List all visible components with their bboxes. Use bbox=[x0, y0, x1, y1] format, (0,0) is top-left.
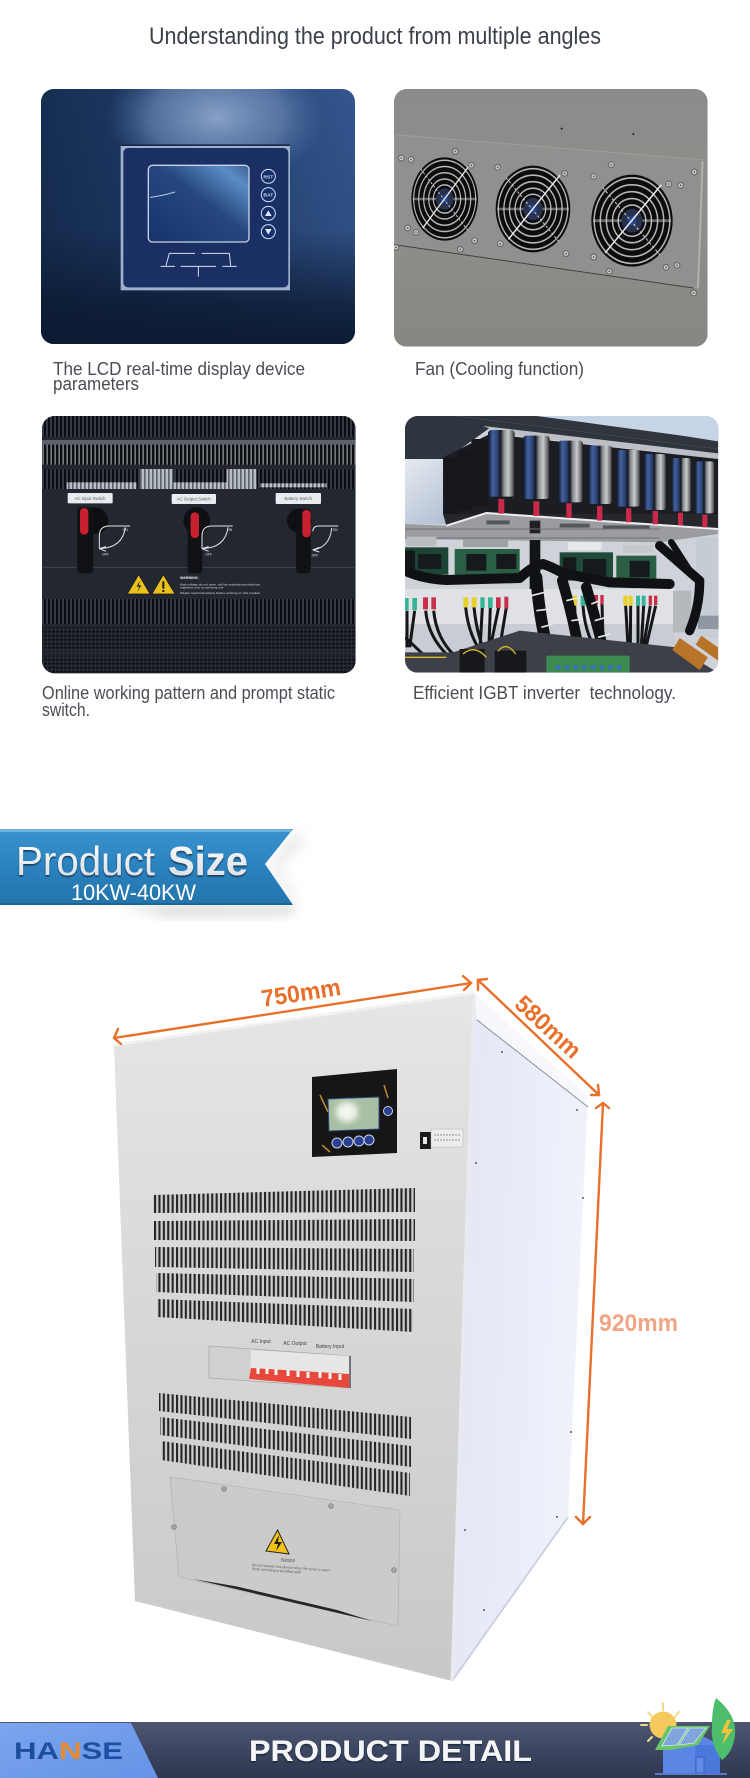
icon: solar house bbox=[641, 1698, 735, 1775]
LCD bezel bbox=[121, 144, 290, 290]
cabinet side bbox=[452, 993, 588, 1681]
dimension: depth label: 580mm bbox=[509, 990, 586, 1064]
breaker panel bbox=[209, 1339, 350, 1388]
dimension: depth arrow bbox=[478, 979, 599, 1095]
banner heading: Size bbox=[168, 838, 248, 884]
switch handle 3: ON bbox=[333, 528, 338, 532]
switch labels: AC Output Switch bbox=[177, 497, 211, 502]
busbar with red terminals bbox=[405, 499, 718, 542]
breaker panel: AC Output bbox=[283, 1341, 307, 1347]
wires and sleeves bbox=[405, 595, 657, 657]
switch handle 2: OFF bbox=[205, 552, 212, 556]
lower access panel bbox=[170, 1477, 400, 1626]
dimension: height arrow bbox=[576, 1103, 609, 1524]
caption: LCD: parameters bbox=[53, 374, 139, 394]
footer heading: PRODUCT DETAIL bbox=[249, 1735, 532, 1768]
control board bbox=[405, 631, 718, 673]
driver boards bbox=[405, 536, 656, 589]
caption: LCD: The LCD real-time display device bbox=[53, 359, 305, 379]
notice text: Do not operate this device when the cover is open bbox=[252, 1563, 330, 1572]
power switch bbox=[420, 1129, 463, 1149]
banner subheading: 10KW-40KW bbox=[71, 880, 196, 905]
breaker panel: Battery Input bbox=[316, 1344, 345, 1350]
banner: Product Size bbox=[0, 829, 306, 916]
caption: switch: Online working pattern and prompt static bbox=[42, 683, 335, 703]
window area bbox=[405, 459, 446, 524]
banner heading: Product bbox=[16, 838, 156, 884]
warning signs: WARNING: bbox=[180, 576, 199, 580]
fan mounting plate bbox=[394, 135, 702, 288]
dimension: width arrow bbox=[114, 976, 471, 1044]
product: inverter cabinet bbox=[114, 993, 588, 1681]
notice text: Refer servicing to qualified staff bbox=[252, 1567, 301, 1574]
footer bar bbox=[0, 1698, 750, 1778]
warning signs: engineers only on servicing one bbox=[180, 586, 224, 590]
gold resistors bbox=[672, 636, 718, 670]
upper vents bbox=[42, 416, 356, 489]
lower vents bbox=[159, 1393, 411, 1496]
dimension: height label: 920mm bbox=[599, 1310, 678, 1337]
warning signs: High voltage do not open, call the professional electrical bbox=[180, 583, 260, 587]
switch handle 2: ON bbox=[227, 528, 233, 532]
warning triangle bbox=[266, 1530, 289, 1554]
dimension: width label: 750mm bbox=[259, 974, 343, 1013]
warning signs bbox=[127, 575, 260, 595]
screws bbox=[393, 128, 698, 296]
cable bundles bbox=[405, 542, 700, 656]
caption: switch: switch. bbox=[42, 700, 90, 720]
buttons: RST bbox=[263, 174, 273, 180]
breaker panel: AC Input bbox=[251, 1339, 271, 1345]
banner heading bbox=[16, 838, 248, 884]
notice text bbox=[252, 1558, 330, 1574]
switch labels bbox=[68, 493, 321, 504]
buttons bbox=[261, 169, 275, 239]
upper vents bbox=[153, 1188, 415, 1332]
caption: fan: Fan (Cooling function) bbox=[415, 359, 584, 379]
fan 3 bbox=[591, 175, 673, 267]
cabinet front bbox=[114, 993, 474, 1681]
side screws bbox=[464, 1051, 584, 1611]
switch handle 2 bbox=[183, 507, 233, 573]
LCD control panel bbox=[312, 1069, 397, 1157]
panel: cooling fans photo bbox=[393, 89, 708, 347]
warning signs: Please read instructions before working on this product bbox=[180, 591, 260, 595]
lower vents bbox=[42, 599, 356, 673]
power flow schematic bbox=[161, 253, 237, 277]
switch handle 3 bbox=[287, 508, 338, 573]
fan 1 bbox=[411, 157, 478, 241]
buttons: BAT bbox=[263, 193, 273, 199]
switch handle 3: OFF bbox=[312, 553, 318, 557]
logo text: HA NSE bbox=[14, 1738, 123, 1765]
switch handle 1: OFF bbox=[102, 552, 109, 556]
capacitors bbox=[443, 430, 718, 514]
title: Understanding the product from multiple angles bbox=[149, 23, 601, 50]
lower plate bbox=[405, 538, 719, 637]
top bracket bbox=[405, 416, 718, 459]
switch handle 1: ON bbox=[123, 528, 128, 532]
switch labels: AC Input Switch bbox=[75, 496, 106, 501]
switch handle 1 bbox=[77, 507, 130, 573]
fan 2 bbox=[496, 166, 570, 252]
logo block bbox=[0, 1723, 158, 1778]
switch labels: Battery Switch bbox=[284, 496, 313, 501]
LCD screen bbox=[148, 165, 249, 242]
caption: IGBT: Efficient IGBT inverter technology. bbox=[413, 683, 676, 703]
panel: IGBT inverter photo bbox=[405, 416, 719, 673]
panel: switches photo bbox=[42, 416, 356, 673]
notice text: Notice bbox=[281, 1558, 295, 1564]
cable ties bbox=[531, 592, 610, 637]
panel: LCD display photo bbox=[41, 89, 355, 344]
